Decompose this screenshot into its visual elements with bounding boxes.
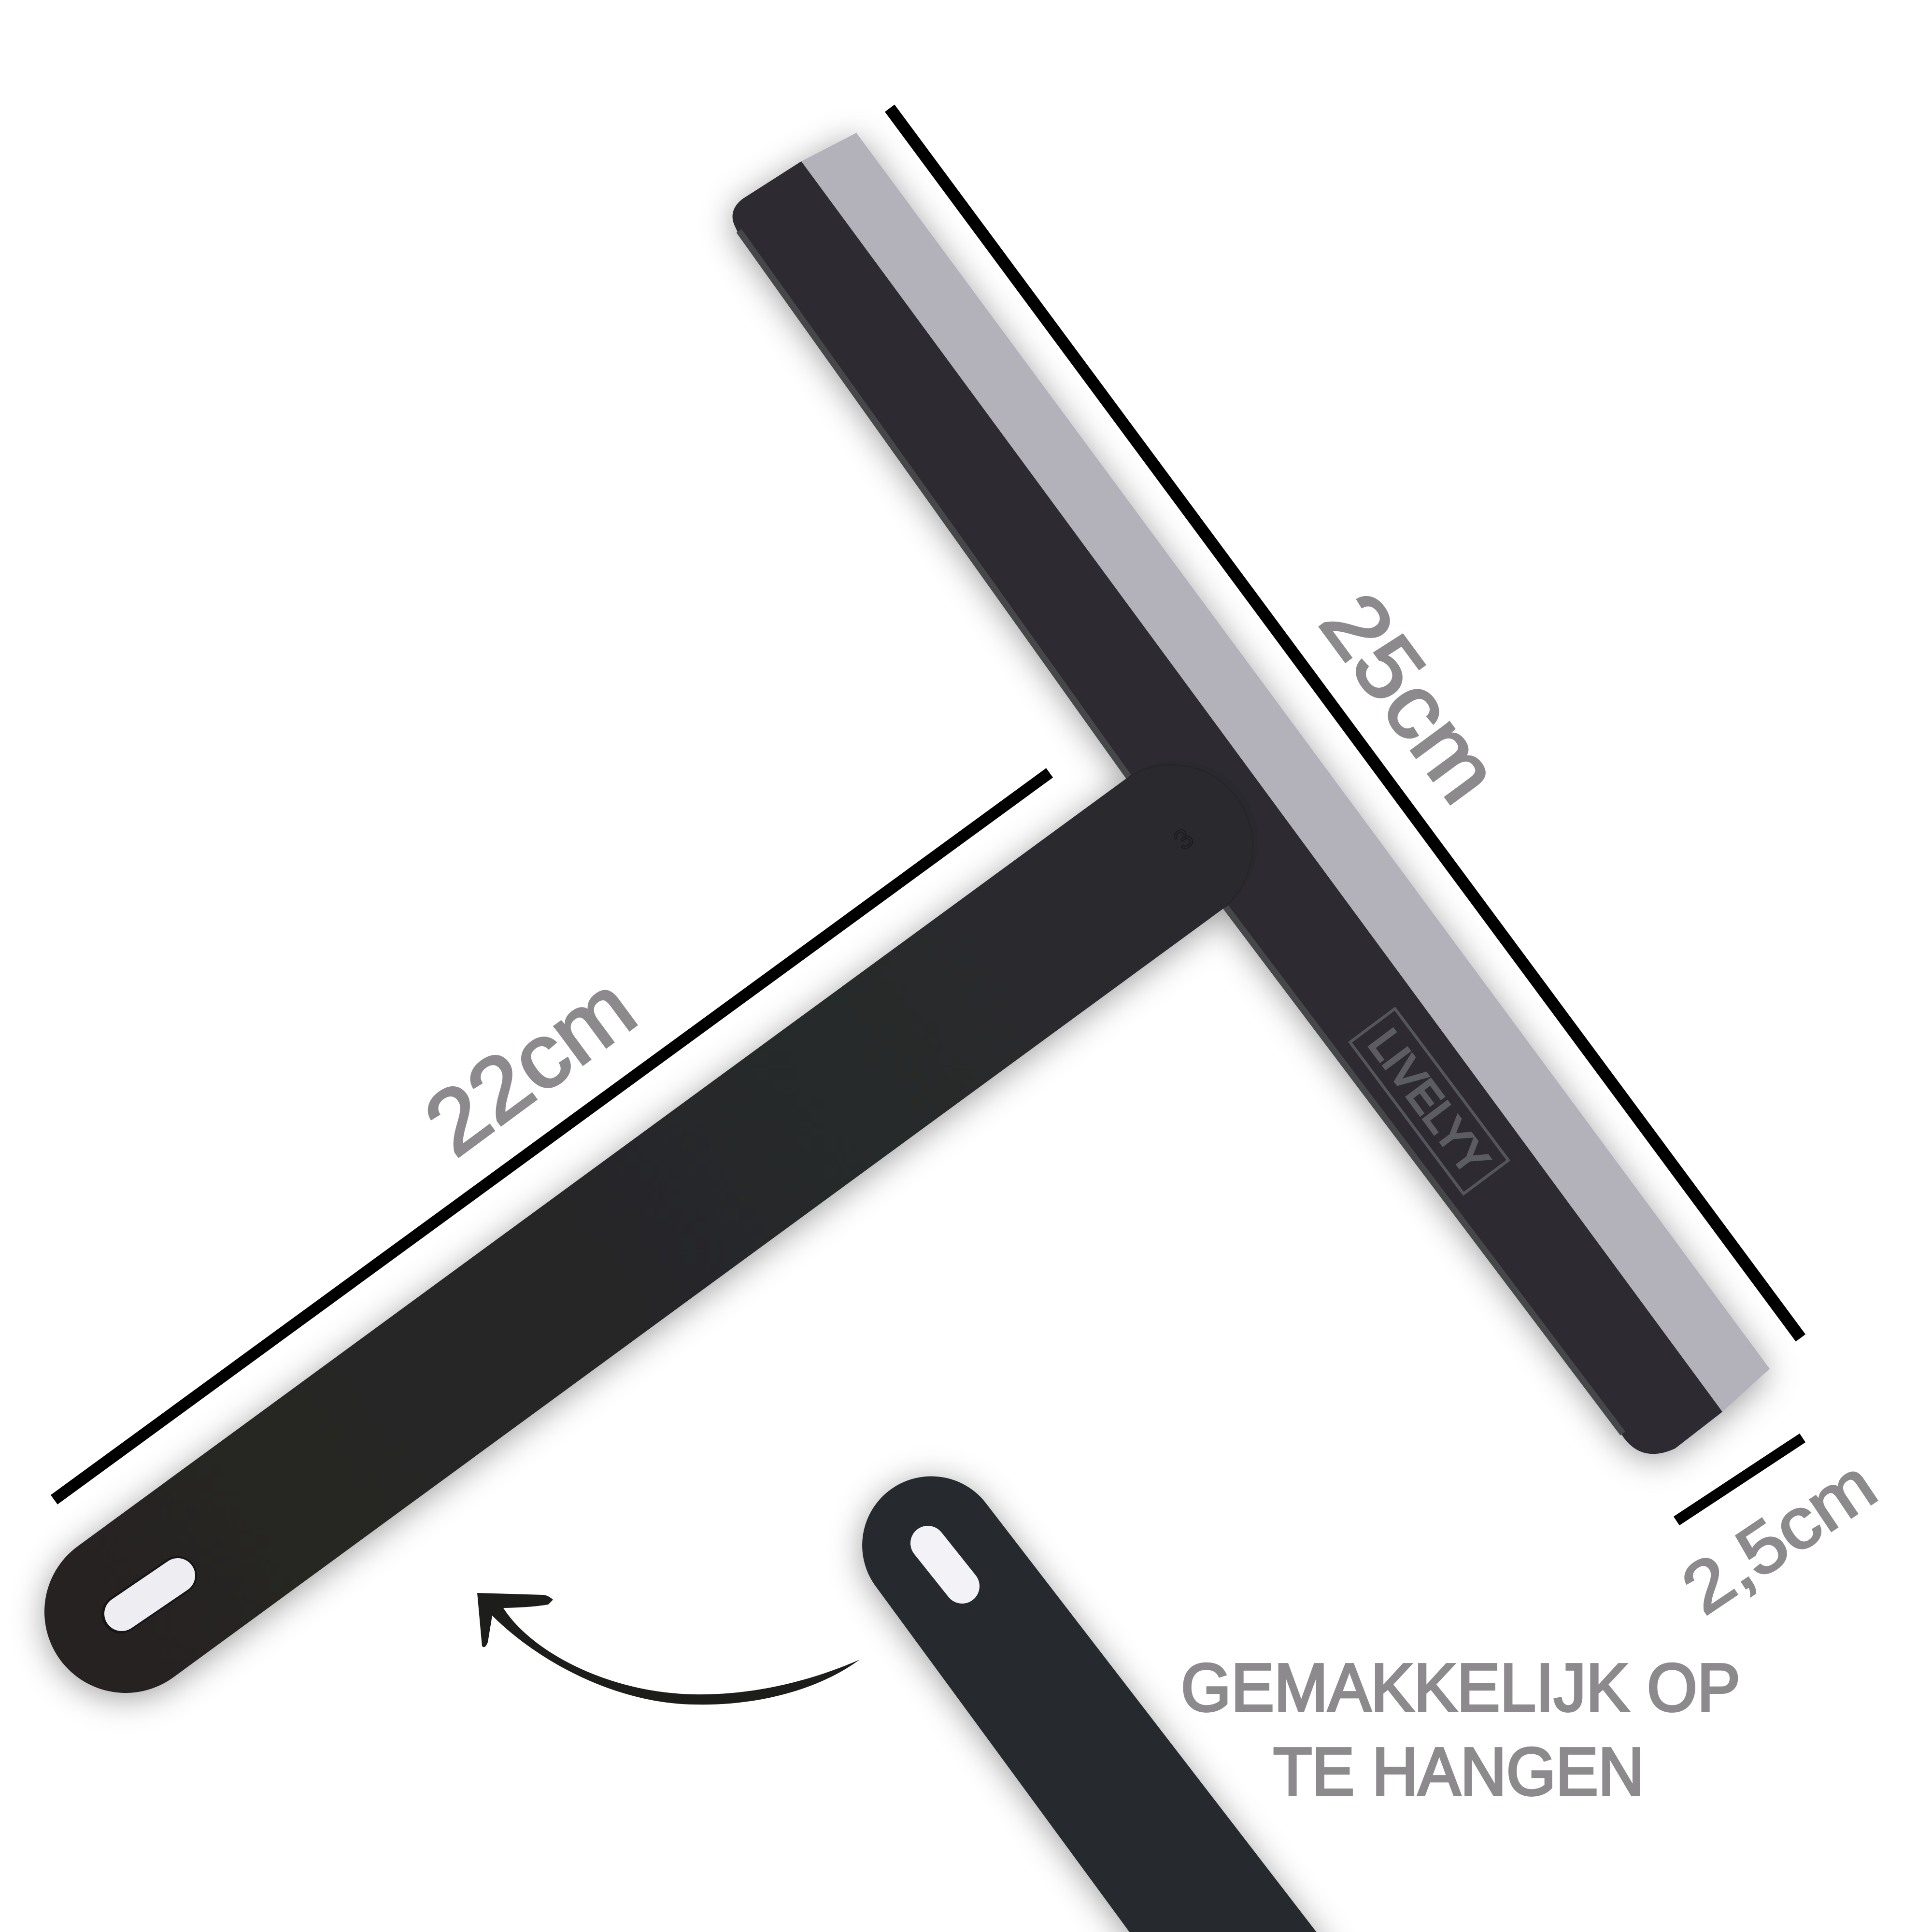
measure line: 2,5cm <box>1676 1438 1803 1521</box>
hanging hole <box>121 1576 178 1614</box>
measure label: 2,5cm: 2,5cm <box>1668 1444 1890 1630</box>
hole opening <box>122 1576 178 1614</box>
measure label: 22cm: 22cm <box>407 956 653 1175</box>
label frame <box>1350 1009 1508 1194</box>
squeegee product <box>121 133 1770 1614</box>
caption line 2: TE HANGEN <box>1273 1733 1644 1809</box>
caption line 1: GEMAKKELIJK OP <box>1181 1649 1740 1725</box>
measure label: 25cm: 25cm <box>1302 575 1519 820</box>
curved arrow <box>477 1593 860 1705</box>
measure line: 22cm <box>54 773 1050 1500</box>
hub seam <box>1129 765 1253 907</box>
measure line: 25cm <box>890 108 1801 1338</box>
caption <box>1181 1649 1740 1809</box>
hub mark: 3 <box>1167 822 1200 856</box>
long handle body <box>126 842 1177 1612</box>
head bevel edge <box>739 231 1623 1434</box>
detail hanging hole <box>928 1543 962 1586</box>
hole rim <box>121 1576 178 1614</box>
detail handle <box>862 1476 1335 1932</box>
brand label LIVELYY <box>1350 1009 1508 1194</box>
label text: LIVELYY <box>1359 1021 1498 1183</box>
dark head bar <box>732 161 1722 1454</box>
detail handle body <box>862 1476 1335 1932</box>
grey rubber blade <box>801 133 1770 1412</box>
